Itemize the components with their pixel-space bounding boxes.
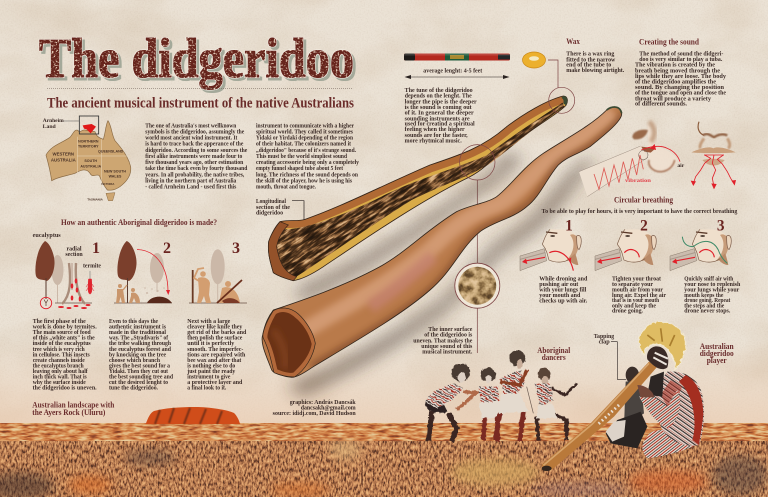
breathing step 2 text: drone going. bbox=[612, 309, 644, 315]
step 2 text: cut the desired lenght to bbox=[109, 380, 168, 386]
inner surface detail circle bbox=[455, 263, 500, 308]
map of Australia: AUSTRALIA bbox=[80, 164, 101, 168]
wax ring bbox=[522, 52, 546, 68]
creating the sound text: throat will produce a variety bbox=[635, 96, 711, 102]
breathing step 2 text: to separate your bbox=[612, 282, 653, 288]
dancers label: dancers bbox=[542, 353, 566, 362]
breathing step 1 bbox=[520, 218, 581, 271]
creating the sound text: of different sounds. bbox=[635, 102, 688, 108]
map of Australia: TERRITORY bbox=[78, 144, 99, 148]
landscape caption bbox=[32, 400, 115, 417]
subtitle: The ancient musical instrument of the native Australians bbox=[47, 96, 354, 112]
tone text: more rhytmical music. bbox=[405, 139, 462, 145]
step 3 text: a final look to it. bbox=[187, 386, 227, 392]
step 3 text: get rid of the barks and bbox=[187, 330, 247, 336]
dancer 4 bbox=[535, 368, 577, 441]
wax text: make blowing airtight. bbox=[566, 68, 625, 74]
map of Australia: AUSTRALIA bbox=[51, 158, 76, 162]
landscape ground bbox=[0, 423, 768, 497]
map of Australia: WESTERN bbox=[53, 152, 74, 156]
dancers label: Aboriginal bbox=[537, 346, 571, 355]
breathing step 3 text: your nose to replenish bbox=[684, 282, 741, 288]
tone text: is the sound is coming out bbox=[405, 105, 472, 111]
step 2 text: tune the didgeridoo. bbox=[109, 386, 158, 392]
intro text column 1: years. In all probability, the native tribes, bbox=[145, 172, 245, 178]
circular breathing heading: Circular breathing bbox=[614, 196, 674, 204]
map of Australia: SOUTH bbox=[84, 159, 97, 163]
intro text column 2: Yidaki or Yirdaki depending of the region bbox=[256, 136, 354, 142]
intro text column 2: long. The richness of the sound depends on bbox=[256, 172, 359, 178]
longitudinal section of the didgeridoo bbox=[268, 96, 568, 302]
creating the sound text: The vibration is created by the bbox=[635, 63, 715, 69]
step 3 illustration: cleaning the tube: 3 bbox=[232, 240, 240, 257]
wax text: end of the tube to bbox=[566, 63, 611, 69]
section shadow bbox=[293, 153, 523, 300]
inner surface caption: musical instrument. bbox=[422, 349, 473, 355]
whole tube shadow bbox=[287, 157, 597, 395]
tone text: sounds are for the faster, bbox=[405, 133, 468, 139]
step 2 text: made in the traditional bbox=[109, 330, 166, 336]
step 3 text: instrument to give bbox=[187, 374, 231, 380]
Uluru rock bbox=[146, 407, 240, 424]
step 3 text: smooth. The imperfec- bbox=[187, 347, 243, 353]
player label bbox=[700, 342, 734, 365]
inner surface caption bbox=[413, 327, 473, 355]
intro text column 2: empty funnel shaped tube about 5 feet bbox=[256, 166, 343, 172]
breathing step 2 text: lung air. Expel the air bbox=[612, 293, 666, 299]
whole didgeridoo bbox=[257, 100, 627, 395]
intro text column 1: living in the northern part of Australia bbox=[145, 178, 236, 184]
player hair bbox=[639, 321, 686, 369]
player hand bbox=[637, 385, 654, 397]
intro text column 2: creating accessorie being only a completely bbox=[256, 160, 359, 166]
step 1 text: The main source of food bbox=[33, 330, 91, 336]
step 3 text bbox=[186, 319, 247, 392]
breathing step 2 text: only and keep the bbox=[612, 303, 656, 309]
credits: graphics: András Dancsák bbox=[290, 400, 356, 406]
step 2 text: the best sounding tree and bbox=[109, 374, 174, 380]
intro text column 1: - called Arnheim Land - used first this bbox=[145, 185, 237, 191]
dancer 2 bbox=[478, 368, 503, 442]
step 1 illustration: termites bbox=[33, 233, 101, 309]
side view of lips and vibrating tube: air bbox=[677, 163, 685, 169]
intro text column 2: instrument to communicate with a higher bbox=[256, 123, 354, 129]
intro text column 1 bbox=[145, 123, 248, 191]
tone text: The tune of the didgeridoo bbox=[405, 88, 473, 94]
wax text: Wax bbox=[566, 37, 580, 46]
step 1 text: The first phase of the bbox=[33, 319, 86, 325]
step 3 text: cleaver like knife they bbox=[187, 325, 242, 331]
breathing step 3 text bbox=[684, 277, 741, 315]
credits: dancsakh@gmail.com bbox=[301, 406, 356, 412]
intro text column 1: five thousand years ago, other estimation bbox=[145, 160, 244, 166]
breathing step 3 text: your lungs while your bbox=[684, 288, 740, 294]
map of Australia: NEW SOUTH bbox=[104, 170, 126, 174]
intro text column 1: world most ancient wind instrument. It bbox=[145, 136, 237, 142]
step 2 text: gives the best sound for a bbox=[109, 363, 170, 369]
step 1 text: inch thick wall. That is bbox=[33, 374, 87, 380]
breathing step 3 text: Quickly sniff air with bbox=[684, 277, 734, 283]
intro text column 1: first alike instruments were made four to bbox=[145, 154, 242, 160]
player head bbox=[647, 346, 668, 369]
breathing step 2 text: that is in your mouth bbox=[612, 298, 660, 304]
connector line through the didgeridoo bbox=[476, 180, 478, 353]
step 2 text: way. The „Stradivaris" of bbox=[109, 336, 169, 342]
step 3 text: Next with a large bbox=[187, 319, 231, 325]
map of Australia: QUEENSLAND bbox=[98, 150, 124, 154]
map of Australia: TASMANIA bbox=[87, 197, 104, 201]
step 3 text: a protective layer and bbox=[187, 380, 243, 386]
callout: longitudinal section label: Longitudinal bbox=[256, 199, 286, 205]
map of Australia: NORTHERN bbox=[78, 140, 99, 144]
step 1 text: the didgeridoo is uneven. bbox=[33, 386, 97, 392]
creating the sound text: Creating the sound bbox=[639, 38, 699, 46]
step 1 illustration: termites: eucalyptus bbox=[33, 233, 61, 239]
step 1 text: leaving only about half bbox=[33, 369, 89, 375]
step 1 text: tree which is very rich bbox=[33, 347, 85, 353]
breathing step 1: 1 bbox=[565, 218, 573, 235]
inner surface caption: of the didgeridoo is bbox=[424, 333, 473, 339]
tapping clap label: Tapping bbox=[594, 334, 614, 340]
step 2 text: Even to this days the bbox=[109, 319, 158, 325]
creating the sound text bbox=[635, 38, 726, 108]
inner surface caption: The inner surface bbox=[428, 327, 473, 333]
breathing step 2 text bbox=[612, 277, 666, 315]
intro text column 1: is hard to trace back the apperance of the bbox=[145, 142, 244, 148]
breathing step 1 text: pushing air out bbox=[539, 282, 578, 288]
wax text: There is a wax ring bbox=[566, 52, 614, 58]
breathing step 3 text: the steps and the bbox=[684, 303, 725, 309]
credits bbox=[273, 400, 356, 417]
didgeridoo player bbox=[541, 321, 704, 471]
intro text column 2: spiritual world. They called it sometimes bbox=[256, 129, 354, 135]
callout: longitudinal section label bbox=[256, 199, 304, 220]
breathing step 3 bbox=[670, 218, 731, 271]
breathing step 2 bbox=[595, 218, 656, 271]
intro text column 1: take the time back even by fourty thousand bbox=[145, 166, 248, 172]
tone text: depends on the lenght. The bbox=[405, 94, 472, 100]
breathing step 3 text: drone going. Repeat bbox=[684, 298, 730, 304]
landscape caption: Australian landscape with bbox=[32, 400, 115, 410]
intro text column 1: symbols is the didgeridoo, assumingly the bbox=[145, 129, 245, 135]
cut rim bbox=[268, 222, 297, 281]
breathing step 3 text: drone never stops. bbox=[684, 309, 731, 315]
inner surface caption: unique sound of this bbox=[421, 344, 473, 350]
breathing step 1 text bbox=[539, 277, 588, 305]
Aboriginal dancers bbox=[425, 350, 577, 442]
inner bark texture bbox=[277, 102, 564, 276]
intro text column 2: the skill of the player, how he is using his bbox=[256, 178, 353, 184]
second musician bbox=[626, 367, 639, 383]
average length arrow bbox=[404, 69, 510, 79]
step 2 illustration: choosing the tree: 2 bbox=[163, 240, 171, 257]
step 2 illustration: choosing the tree bbox=[114, 240, 172, 303]
breathing step 3 text: mouth keeps the bbox=[684, 293, 724, 299]
intro text column 2: mouth, throat and tongue. bbox=[256, 185, 316, 191]
breathing step 1 text: your mouth and bbox=[539, 293, 581, 299]
player arm bbox=[639, 390, 680, 428]
breathing step 2 text: Tighten your throat bbox=[612, 277, 661, 283]
tapping clap label: clap bbox=[599, 340, 610, 346]
landscape caption: the Ayers Rock (Uluru) bbox=[32, 408, 105, 417]
mouth of the tube bbox=[263, 308, 315, 377]
creating the sound text: sound. By changing the position bbox=[635, 85, 725, 91]
dancers label bbox=[537, 346, 571, 362]
creating the sound text: breath being moved through the bbox=[635, 68, 720, 74]
tone text bbox=[405, 88, 477, 145]
dancer 1 bbox=[425, 363, 477, 442]
step 3 illustration: cleaning the tube bbox=[189, 240, 247, 303]
player label: didgeridoo bbox=[700, 349, 734, 358]
map of Australia: Land bbox=[43, 124, 57, 130]
breathing step 3: 3 bbox=[717, 218, 725, 235]
dancer 3 bbox=[495, 350, 533, 441]
step 2 text: the tribe walking through bbox=[109, 341, 172, 347]
tapping clap label bbox=[594, 334, 626, 379]
tone text: of it. In general the deeper bbox=[405, 111, 474, 117]
player label: player bbox=[707, 356, 727, 365]
map of Australia: WALES bbox=[109, 174, 122, 178]
front view of lips with air bbox=[691, 122, 736, 189]
tone text: sounding instruments are bbox=[405, 116, 470, 122]
step 1 illustration: termites: termite bbox=[83, 264, 101, 270]
step 2 text: Yidaki. Then they cut out bbox=[109, 369, 168, 375]
creating the sound text: of the didgeridoo amplifies the bbox=[635, 80, 716, 86]
step 1 illustration: termites: section bbox=[65, 252, 83, 258]
how it is made heading: How an authentic Aboriginal didgeridoo is made? bbox=[61, 218, 217, 227]
intro text column 1: didgeridoo. According to some sources the bbox=[145, 148, 248, 154]
map of Australia: Arnheim bbox=[43, 118, 64, 124]
wax text: fitted to the narrow bbox=[566, 57, 616, 63]
circular breathing heading bbox=[542, 196, 737, 215]
breathing step 1 text: with your lungs fill bbox=[539, 288, 587, 294]
step 1 text: the eucalyptus branch bbox=[33, 363, 84, 369]
callout: longitudinal section label: section of the bbox=[256, 205, 290, 211]
map of Australia bbox=[43, 116, 131, 201]
map of Australia: VICTORIA bbox=[101, 182, 114, 186]
creating the sound text: The method of sound the didgeri- bbox=[639, 52, 723, 58]
player instrument bbox=[541, 362, 657, 471]
side view of lips and vibrating tube bbox=[579, 122, 685, 197]
step 1 text: of this „white ants" is the bbox=[33, 336, 95, 342]
tone text: used for creatind a spiritual bbox=[405, 122, 475, 128]
intro text column 2: „didgeridoo" because of it's strange sound. bbox=[256, 148, 356, 154]
player legs and body bbox=[606, 412, 647, 448]
step 2 text bbox=[109, 319, 174, 392]
step 1 illustration: termites: 1 bbox=[92, 240, 100, 257]
step 1 illustration: termites: radial bbox=[66, 246, 82, 252]
breathing step 1 text: checks up with air. bbox=[539, 299, 588, 305]
step 2 text: the eucalyptus forest and bbox=[109, 347, 172, 353]
step 3 text: is nothing else to do bbox=[187, 363, 235, 369]
circular breathing heading: To be able to play for hours, it is very important to have the correct breathing bbox=[542, 209, 737, 215]
step 2 text: authentic instrument is bbox=[109, 325, 167, 331]
title: The didgeridoo bbox=[39, 28, 354, 90]
intro text column 2: of their habitat. The colonizers named it bbox=[256, 142, 351, 148]
intro text column 2 bbox=[256, 123, 359, 191]
step 3 text: then polish the surface bbox=[187, 336, 243, 342]
breathing step 2: 2 bbox=[640, 218, 648, 235]
intro text column 1: The one of Australia's most wellknown bbox=[145, 123, 237, 129]
section body bbox=[281, 96, 566, 280]
wax text bbox=[566, 37, 625, 74]
step 1 text: in cellulose. This insects bbox=[33, 352, 90, 358]
step 1 text: why the surface inside bbox=[33, 380, 86, 386]
side view of lips and vibrating tube: vibration bbox=[625, 178, 652, 184]
creating the sound text: doo is very similar to play a tuba. bbox=[639, 57, 723, 63]
inner surface caption: uneven. That makes the bbox=[413, 338, 473, 344]
callout: longitudinal section label: didgeridoo bbox=[256, 211, 283, 217]
creating the sound text: lips while they are loose. The body bbox=[635, 74, 726, 80]
intro text column 2: This must be the world simpliest sound bbox=[256, 154, 348, 160]
creating the sound text: of the tongue and open and close the bbox=[635, 91, 726, 97]
small painted didgeridoo bbox=[404, 54, 510, 60]
average length arrow: average lenght: 4-5 feet bbox=[423, 69, 482, 75]
step 3 text: bee wax and after that bbox=[187, 358, 241, 364]
step 3 text: just paint the ready bbox=[186, 369, 235, 375]
step 3 text: until it is perfectly bbox=[187, 341, 234, 347]
step 1 text bbox=[33, 319, 97, 392]
wax callout circles bbox=[460, 60, 575, 180]
step 1 text: create channels inside bbox=[33, 358, 85, 364]
credits: source: ididj.com, David Hudson bbox=[273, 411, 356, 417]
tone text: longer the pipe is the deeper bbox=[405, 99, 477, 105]
step 1 text: inside of the eucalyptus bbox=[33, 341, 91, 347]
step 2 text: by knocking on the tree bbox=[109, 352, 166, 358]
tone text: feeling when the higher bbox=[405, 127, 465, 133]
step 3 text: tions are repaired with bbox=[187, 352, 246, 358]
breathing step 1 text: While droning and bbox=[539, 277, 588, 283]
player label: Australian bbox=[700, 342, 734, 351]
breathing step 2 text: mouth air from your bbox=[612, 288, 663, 294]
step 1 text: work is done by termites. bbox=[33, 325, 97, 331]
step 2 text: choose which branch bbox=[109, 358, 161, 364]
